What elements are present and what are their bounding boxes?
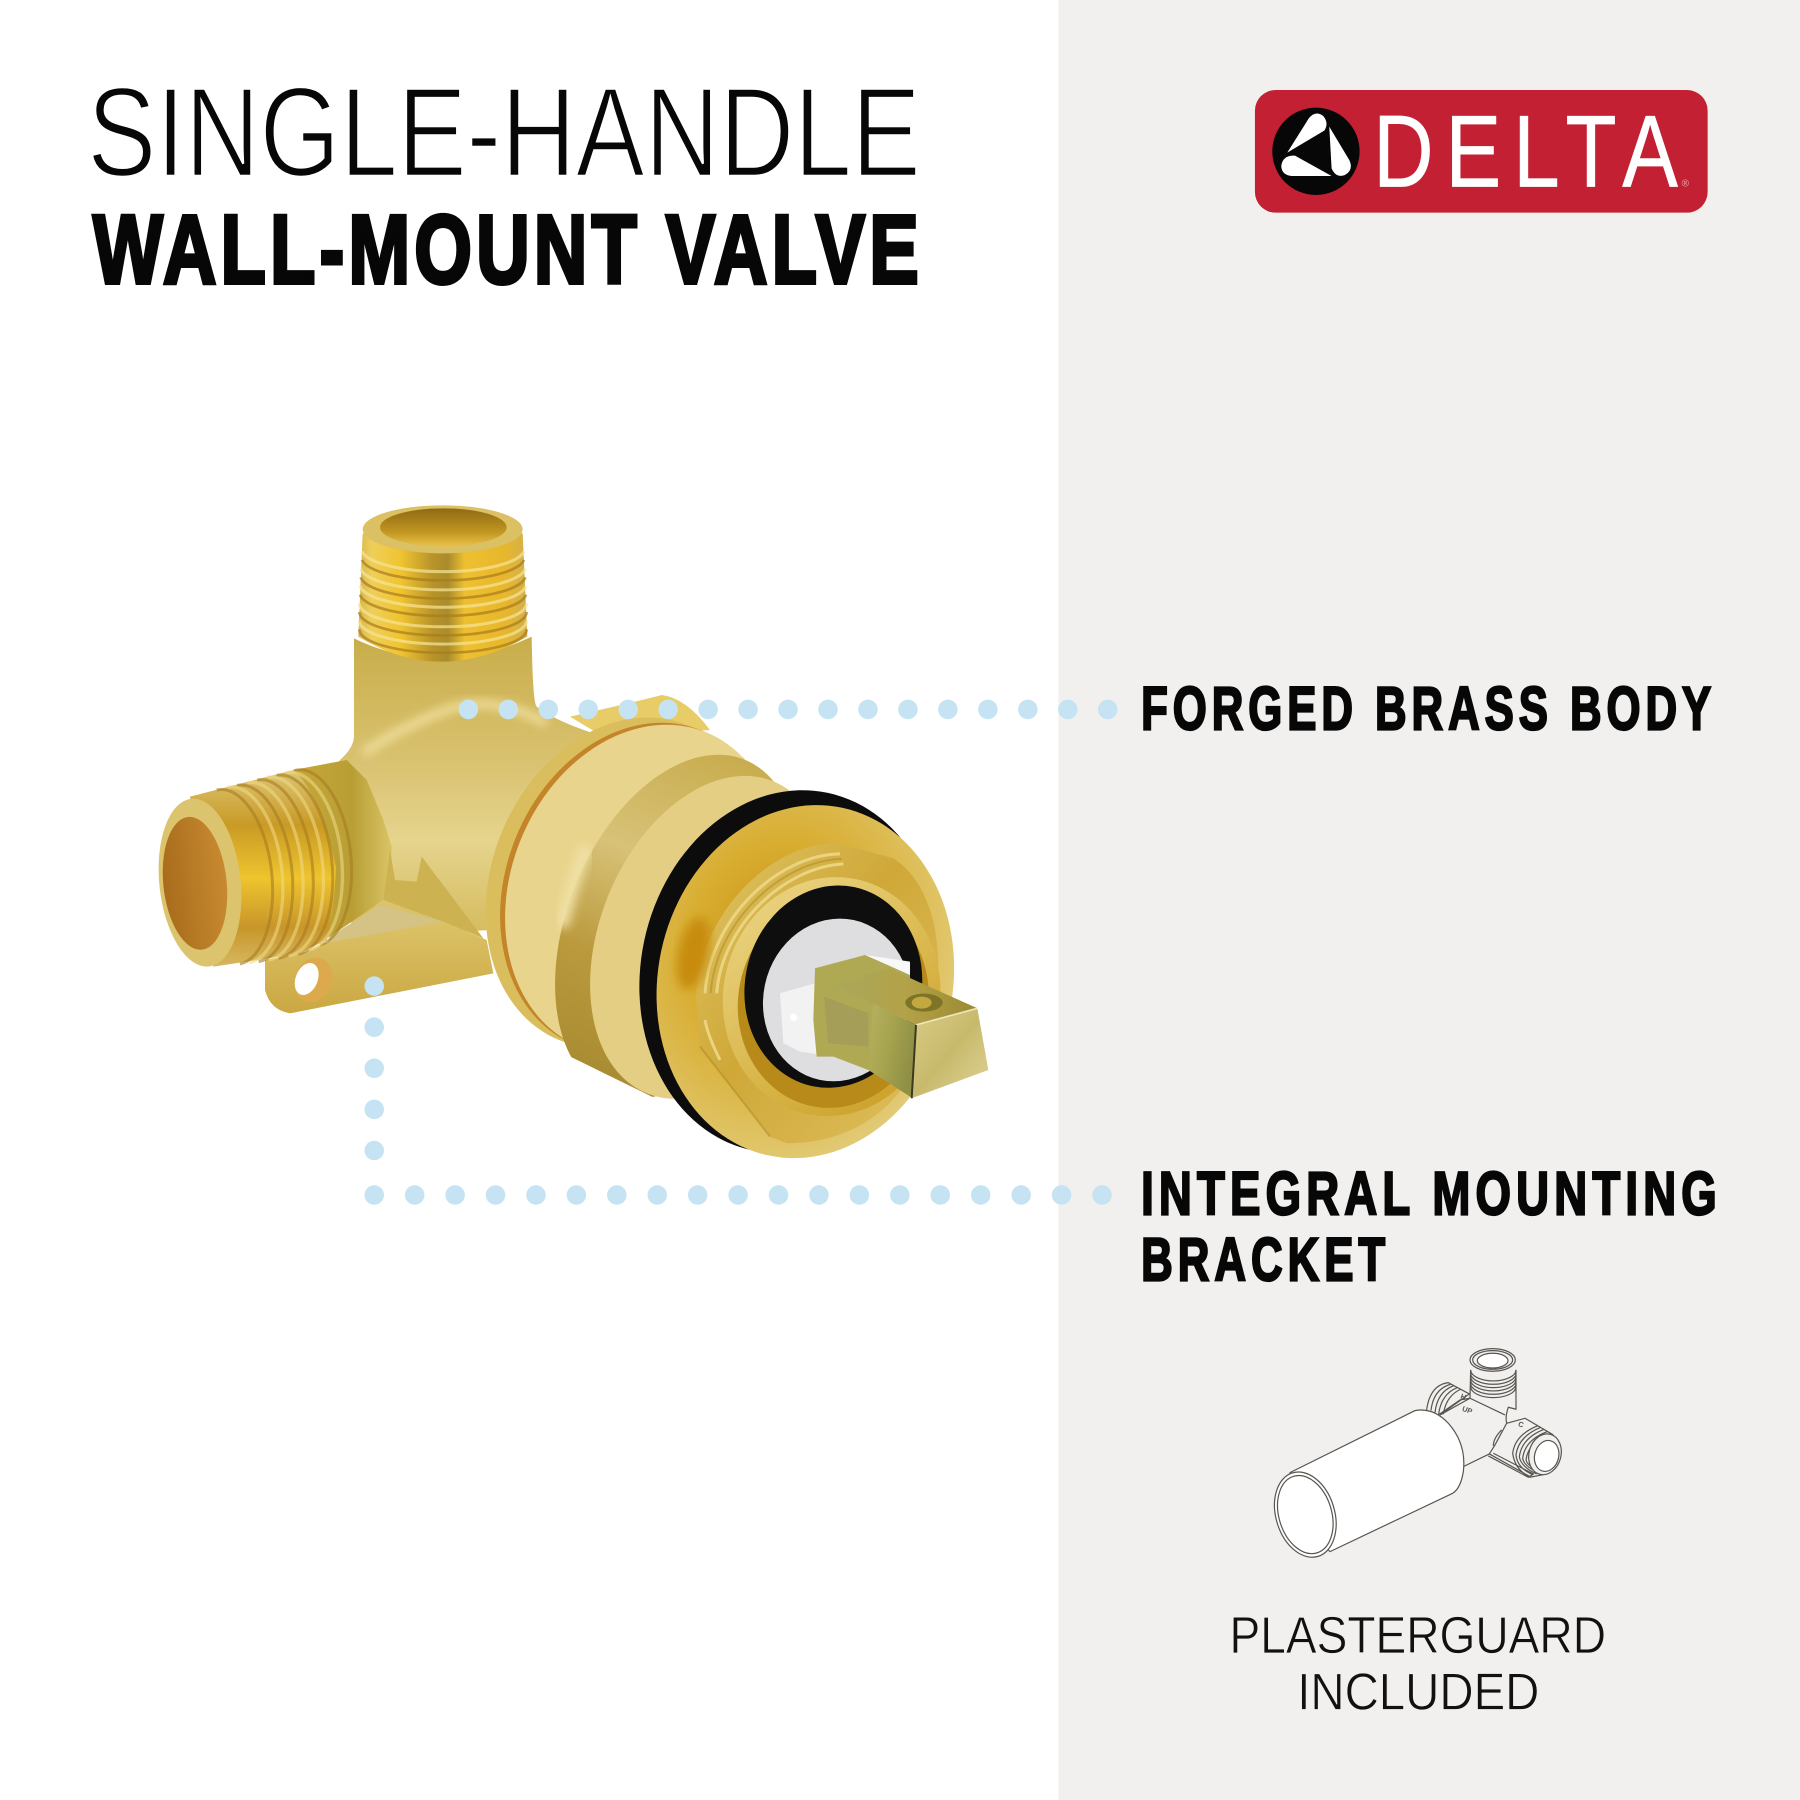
lower body web	[383, 850, 483, 938]
gusset	[327, 905, 443, 945]
panel: grey right column	[1058, 0, 1800, 1800]
band highlight	[562, 847, 587, 927]
stem hole	[905, 994, 943, 1012]
large cylinder	[486, 718, 790, 1099]
valve front face	[606, 762, 988, 1186]
white cartridge	[748, 905, 925, 1095]
rear bump	[570, 695, 710, 737]
top thread	[1470, 1349, 1516, 1398]
background: white left area	[0, 0, 1058, 1800]
plasterguard cylinder	[1290, 1410, 1464, 1552]
left thread	[1427, 1383, 1469, 1415]
inner recess	[718, 878, 948, 1126]
socket ridge highlight	[363, 704, 547, 753]
front barrel	[590, 776, 790, 1099]
bronze step band	[555, 754, 774, 1097]
product photo: brass valve	[151, 505, 988, 1186]
callout leader: forged brass body dots	[468, 701, 1109, 718]
orange glow	[671, 914, 716, 992]
caption: plasterguard included	[1229, 1606, 1606, 1720]
title	[87, 62, 923, 304]
icon: Delta triangle mark	[1272, 108, 1360, 195]
caption: plasterguard included: PLASTERGUARD	[1229, 1606, 1606, 1664]
bracket hole	[288, 952, 339, 1008]
left side: neck, bracket, threaded nipple	[151, 760, 493, 1013]
mounting bracket	[265, 922, 493, 1013]
stamped letters: C	[1517, 1419, 1526, 1430]
top threaded nipple	[358, 505, 527, 662]
front flange	[624, 777, 986, 1186]
cream barrel	[505, 724, 746, 1038]
title line: single-handle: SINGLE-HANDLE	[87, 62, 921, 204]
stamped letters: H	[1459, 1392, 1467, 1402]
callout label: integral mounting bracket: BRACKET	[1141, 1226, 1390, 1294]
callout leader: mounting bracket dots	[374, 986, 1103, 1195]
square stem	[813, 955, 988, 1098]
caption: plasterguard included: INCLUDED	[1297, 1662, 1539, 1720]
bracket edge	[1488, 1453, 1533, 1477]
logo: Delta badge	[1255, 90, 1708, 213]
logo wordmark: DELTA	[1373, 95, 1690, 209]
left threaded nipple	[151, 770, 352, 971]
title line: wall-mount valve: WALL-MOUNT VALVE	[93, 195, 923, 304]
stamped letters: UP	[1461, 1404, 1474, 1416]
orange groove	[500, 722, 708, 1040]
neck shadow	[293, 760, 392, 943]
washer ring	[701, 857, 963, 1137]
valve body outline	[1438, 1370, 1553, 1477]
threaded ring	[696, 843, 938, 1143]
registered mark: ®	[1682, 179, 1690, 190]
icon: plasterguard line drawing	[1264, 1349, 1566, 1565]
collar rim	[486, 718, 690, 1042]
callout label: integral mounting bracket	[1141, 1160, 1722, 1294]
forged body and top socket	[320, 505, 593, 937]
black seat	[726, 869, 941, 1104]
right thread	[1513, 1426, 1566, 1478]
o-ring	[606, 762, 974, 1181]
stamped letters	[1459, 1392, 1526, 1430]
